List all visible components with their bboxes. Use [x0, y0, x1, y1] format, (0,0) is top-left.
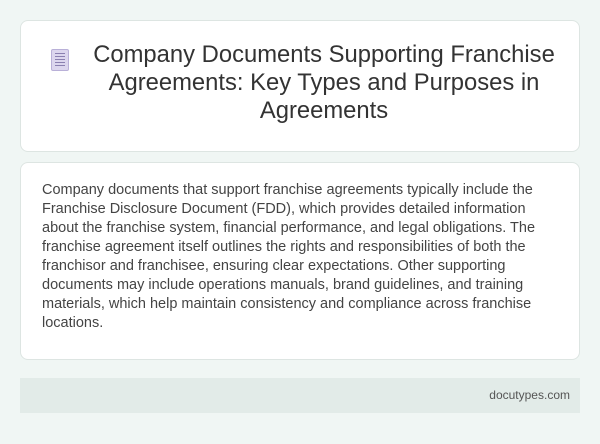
icon: document: [51, 49, 69, 71]
description text: Company documents that support franchise agreements typically include the: [42, 182, 533, 198]
description text: about the franchise system, financial performance, and legal obligations. The: [42, 220, 535, 236]
description text: [42, 182, 535, 331]
description text: franchise agreement itself outlines the rights and responsibilities of both the: [42, 239, 526, 255]
description text: franchisor and franchisee, ensuring clear expectations. Other supporting: [42, 258, 505, 274]
header card: [20, 20, 580, 152]
body text card: [20, 162, 580, 360]
description text: Franchise Disclosure Document (FDD), which provides detailed information: [42, 201, 526, 217]
description text: locations.: [42, 315, 103, 331]
description text: materials, which help maintain consistency and compliance across franchise: [42, 296, 531, 312]
footer: [20, 378, 580, 413]
title: Company Documents Supporting Franchise Agreements: Key Types and Purposes in Agreements: [93, 41, 555, 124]
footer text: docutypes.com: [489, 388, 570, 402]
description text: documents may include operations manuals, brand guidelines, and training: [42, 277, 523, 293]
